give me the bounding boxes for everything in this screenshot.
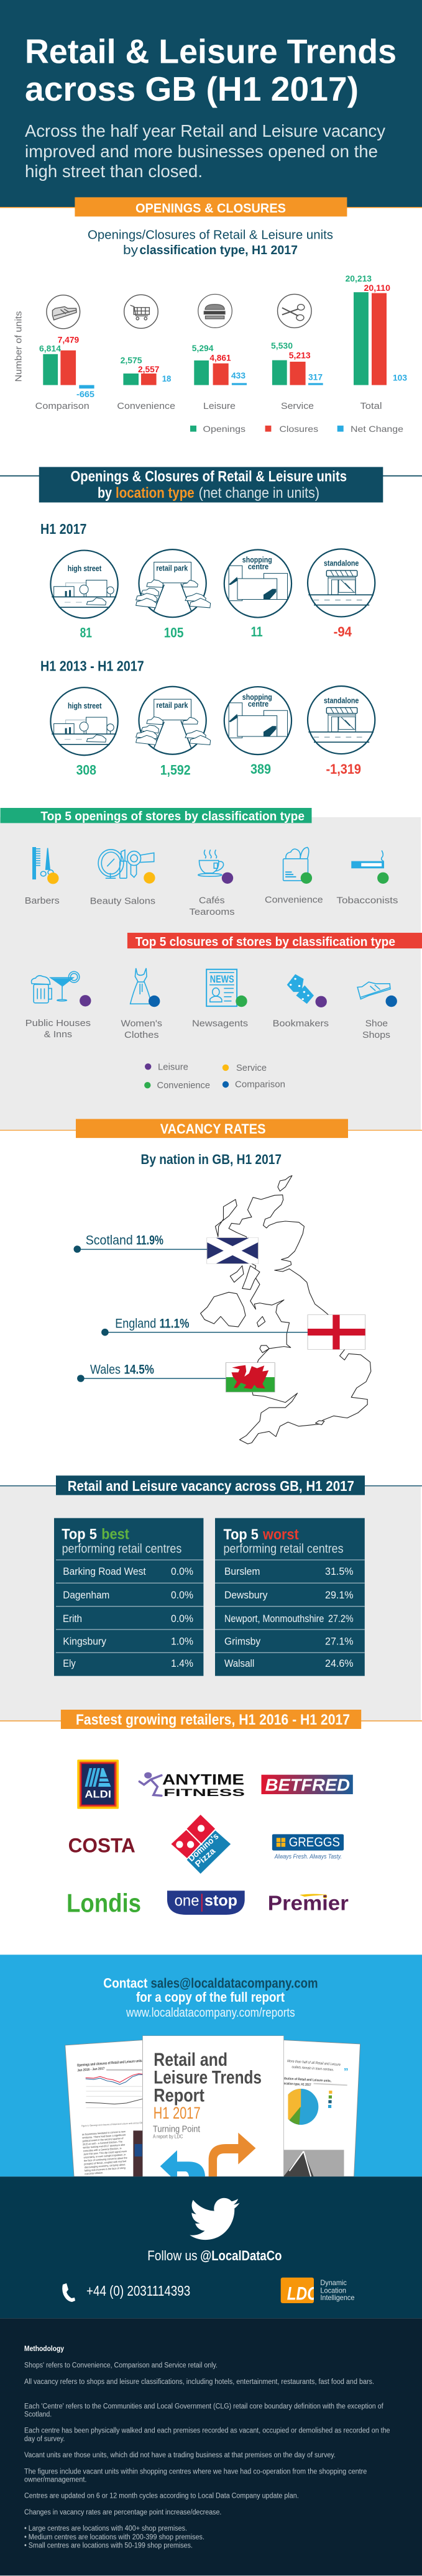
tagline: Location	[320, 2286, 346, 2294]
report link: www.localdatacompany.com/reports	[126, 2006, 295, 2020]
section banner: location type: Openings & Closures of Retail & Leisure units	[71, 468, 347, 485]
report page: right	[283, 2040, 360, 2176]
icon: tobacconists	[336, 850, 398, 905]
cover title: Retail and	[154, 2050, 227, 2070]
logo: Londis: Londis	[67, 1889, 141, 1918]
logo: Domino's Pizza	[171, 1815, 231, 1874]
report page: cover: A report by LDC	[153, 2134, 183, 2140]
value labels: openings: 5,530	[271, 341, 293, 351]
icon: standalone shop	[308, 686, 375, 754]
icon: standalone shop	[308, 549, 375, 616]
flag: Scotland	[207, 1238, 258, 1263]
callout: England	[101, 1317, 308, 1336]
table: top 5 best: Top 5	[62, 1526, 97, 1543]
follow text	[147, 2248, 282, 2263]
table: top 5 best: best	[101, 1526, 129, 1543]
table: top 5 best: Dagenham	[63, 1589, 109, 1601]
table: top 5 best: 0.0%	[171, 1613, 193, 1625]
icon: bookmakers: Bookmakers	[273, 1019, 329, 1029]
net change numbers	[80, 624, 352, 640]
flag: Wales	[226, 1363, 275, 1392]
net change numbers: 1,592	[160, 762, 191, 778]
methodology heading: Methodology	[24, 2345, 65, 2353]
map outline	[201, 1176, 371, 1444]
callout: Scotland	[73, 1234, 207, 1253]
logo: Domino's Pizza: Pizza	[193, 1846, 217, 1869]
heading: H1 2017: H1 2017	[40, 521, 87, 537]
report page: left: 2015 as well – a General Election. The	[83, 2140, 123, 2146]
report page: left: uncertainty, or even outright trepidation, in	[83, 2153, 126, 2159]
report page: right: More than half of all Retail and Leisure	[287, 2060, 341, 2067]
banner: top 5 closures: Top 5 closures of stores by classification type	[135, 935, 395, 949]
panel: header	[0, 0, 422, 208]
value labels: net change: 18	[162, 374, 172, 383]
icon: shopping centre: centre	[248, 562, 268, 571]
category labels: Service	[281, 401, 314, 411]
net change numbers: -94	[334, 624, 352, 639]
title: Retail & Leisure Trends	[25, 32, 397, 71]
table: top 5 worst: Dewsbury	[224, 1589, 268, 1601]
methodology text: • Large centres are locations with 400+ shop premises.	[24, 2525, 187, 2532]
contact text: for a copy of the full report	[136, 1989, 285, 2005]
value labels: openings: 6,814	[39, 344, 61, 354]
heading: H1 2013 - H1 2017: H1 2013 - H1 2017	[40, 658, 144, 674]
legend: classification colours: Service	[236, 1063, 267, 1073]
net change numbers	[76, 761, 361, 778]
table: top 5 best: 0.0%	[171, 1565, 193, 1577]
logo: One Stop	[167, 1891, 245, 1915]
section banner: openings and closures	[75, 197, 347, 216]
table: top 5 worst: Grimsby	[224, 1636, 261, 1648]
value labels: closures: 7,479	[58, 335, 79, 345]
panel: methodology	[0, 2318, 422, 2575]
icon: cafes and tearooms: Cafés	[199, 895, 225, 905]
table: top 5 worst: performing retail centres	[224, 1542, 344, 1556]
value labels: openings: 20,213	[346, 273, 372, 283]
table: top 5 worst: Newport, Monmouthshire	[224, 1613, 324, 1625]
report page: left: falling real incomes in the face of rising	[85, 2166, 126, 2172]
panel: retailer logos	[67, 1759, 353, 1918]
icon: shopping centre: centre	[248, 699, 268, 708]
value labels: closures: 20,110	[364, 283, 390, 293]
legend: classification colours: Convenience	[157, 1080, 210, 1091]
icon: shopping centre	[224, 687, 291, 754]
callout: Wales: Wales	[90, 1362, 121, 1377]
net change numbers: 389	[250, 761, 271, 777]
callout: Wales	[77, 1362, 226, 1382]
methodology text: Shops' refers to Convenience, Comparison and Service retail only.	[24, 2362, 218, 2370]
section banner: vacancy rates	[0, 1119, 422, 1138]
table: top 5 best: Erith	[63, 1613, 82, 1625]
net change numbers: 11	[251, 624, 263, 639]
icon: public houses and inns	[25, 971, 91, 1040]
report page: left	[65, 2040, 143, 2176]
icon: beauty salons	[90, 850, 155, 907]
contact text	[103, 1976, 318, 2005]
icon: public houses and inns: Public Houses	[25, 1018, 91, 1029]
chart heading: Openings/Closures of Retail & Leisure units	[88, 229, 333, 242]
panel: top 5 openings and closures	[0, 808, 422, 1130]
legend: Net Change	[351, 424, 403, 434]
table: top 5 best: Ely	[63, 1657, 76, 1669]
report page: left: June this year. This dip could signal more	[83, 2150, 127, 2156]
section banner: vacancy rates: VACANCY RATES	[160, 1121, 266, 1137]
title: across GB (H1 2017)	[25, 70, 359, 108]
callout: Wales: 14.5%	[124, 1362, 154, 1377]
chart heading: by	[123, 244, 138, 257]
value labels: net change: 317	[308, 372, 323, 382]
icon: shoe shops: Shops	[362, 1030, 390, 1040]
logo: Domino's Pizza: Domino's	[186, 1831, 221, 1863]
methodology text: day of survey.	[24, 2436, 65, 2443]
icon: convenience	[265, 847, 323, 905]
banner: top 5 openings: Top 5 openings of stores by classification type	[40, 810, 305, 823]
value labels: net change: 103	[393, 373, 407, 383]
bars: leisure	[194, 360, 247, 385]
title	[25, 32, 397, 108]
net change numbers: 105	[164, 625, 183, 640]
report page: left: similar looking mid-2017 downturn also	[83, 2143, 126, 2149]
bars: service	[272, 360, 323, 385]
logo: Anytime Fitness	[139, 1772, 245, 1799]
value labels: closures: 2,557	[138, 364, 160, 374]
icon: barbers	[25, 848, 60, 906]
logo: Betfred: BETFRED	[265, 1776, 350, 1795]
icon: women's clothes: Women's	[121, 1019, 162, 1029]
table: top 5 best: 0.0%	[171, 1589, 193, 1601]
report page: right: ibution of Retail and Leisure units,	[284, 2077, 331, 2083]
panel: social and contact footer	[0, 2176, 422, 2318]
icon: high street	[50, 551, 118, 618]
section banner: location type	[0, 467, 422, 502]
flag: England	[308, 1315, 365, 1349]
table: top 5 best	[54, 1518, 203, 1676]
icon: retail park	[136, 687, 211, 754]
icon: shoe shops: Shoe	[365, 1019, 388, 1029]
logo: One Stop: stop	[204, 1892, 237, 1910]
table: top 5 worst: 27.1%	[325, 1636, 354, 1648]
legend: classification colours	[144, 1061, 285, 1091]
logo: One Stop: one	[175, 1892, 199, 1910]
category labels	[35, 401, 382, 411]
panel: contact	[0, 1955, 422, 2176]
logo: Premier: Premier	[268, 1891, 349, 1914]
table: top 5 worst: Walsall	[224, 1657, 254, 1669]
methodology text: Vacant units are those units, which did not have a trading business at that premises on the day of survey.	[24, 2452, 336, 2459]
logo: Anytime Fitness: ANYTIME	[162, 1772, 244, 1789]
icon: standalone shop: standalone	[324, 558, 359, 567]
icon: women's clothes	[121, 968, 162, 1040]
section banner: location type: location type	[116, 485, 195, 502]
report page: left: political event in the second quarter of	[82, 2137, 124, 2143]
methodology text: Each centre has been physically walked and each premises recorded as vacant, occupied or demolished as recorded on the	[24, 2427, 390, 2435]
icon: shopping centre	[224, 549, 291, 618]
report page: right: ocation type, H1 2017	[283, 2082, 311, 2087]
icon: scissors	[278, 294, 311, 328]
value labels: net change	[76, 370, 407, 399]
bars: convenience	[123, 374, 157, 385]
report page: left: discouraging economy, certainly about	[84, 2163, 126, 2169]
icon: high street	[50, 687, 118, 755]
logo: Greggs: GREGGS	[289, 1835, 340, 1849]
tagline	[320, 2278, 355, 2302]
methodology text: Changes in vacancy rates are percentage point increase/decrease.	[24, 2509, 221, 2516]
icon: twitter bird	[190, 2198, 239, 2240]
icon: retail park: retail park	[156, 563, 188, 572]
logo: Aldi	[77, 1759, 119, 1809]
section banner: location type: (net change in units)	[199, 485, 319, 502]
icon: bookmakers	[273, 974, 329, 1029]
category labels: Convenience	[117, 401, 175, 411]
net change numbers: 308	[76, 762, 96, 778]
methodology text: owner/management.	[24, 2476, 87, 2483]
icon: barbers: Barbers	[25, 896, 60, 906]
icon: cafes and tearooms	[189, 850, 235, 917]
value labels: closures: 4,861	[209, 353, 231, 363]
callout: England: England	[115, 1317, 156, 1331]
value labels: openings: 5,294	[192, 343, 214, 353]
chart heading: classification type, H1 2017	[139, 244, 298, 257]
report page: left: Jan 2016 - Jun 2017	[77, 2067, 105, 2073]
icon: standalone shop: standalone	[324, 695, 359, 705]
table: top 5 best: performing retail centres	[62, 1542, 181, 1556]
callout: Scotland: Scotland	[86, 1234, 133, 1248]
methodology text: • Small centres are locations with 50-199 shop premises.	[24, 2542, 193, 2549]
methodology text	[24, 2362, 390, 2549]
cover title	[154, 2050, 262, 2106]
icon: shopping trolley	[124, 295, 158, 328]
icon: shoe shops	[357, 982, 397, 1040]
section banner: location type: by	[98, 485, 112, 502]
report page: cover: H1 2017	[154, 2104, 201, 2122]
methodology text: Each 'Centre' refers to the Communities and Local Government (CLG) retail core boundary definition with the exception of	[24, 2403, 383, 2410]
table: top 5 worst: 24.6%	[325, 1657, 354, 1669]
value labels: openings: 2,575	[121, 355, 142, 365]
table: top 5 worst: worst	[262, 1526, 299, 1543]
icon: shopping centre: shopping	[242, 555, 272, 564]
section banner: vacancy across GB: Retail and Leisure vacancy across GB, H1 2017	[68, 1478, 354, 1494]
arrow: blue left	[160, 2150, 205, 2176]
legend: Closures	[280, 424, 318, 434]
icon: newsagents	[192, 969, 248, 1029]
legend: classification colours: Comparison	[235, 1079, 285, 1090]
icon: burger	[198, 294, 232, 328]
callout: England: 11.1%	[159, 1317, 190, 1331]
axis title: Number of units	[14, 311, 24, 382]
value labels: closures	[58, 283, 390, 374]
follow text: Follow us	[147, 2248, 198, 2263]
logo: Aldi: ALDI	[85, 1789, 111, 1800]
table: top 5 worst: 31.5%	[325, 1565, 354, 1577]
logo: Costa: COSTA	[68, 1835, 135, 1857]
report page: right: ”	[344, 2066, 348, 2077]
icon: high street: high street	[68, 564, 102, 573]
icon: cafes and tearooms: Tearooms	[189, 907, 235, 917]
table: top 5 worst: 29.1%	[325, 1589, 354, 1601]
category labels: Comparison	[35, 401, 89, 411]
tagline: Intelligence	[320, 2293, 355, 2302]
cover title: Leisure Trends	[154, 2068, 262, 2088]
category labels: Total	[360, 401, 382, 411]
report page: left: ventures. There had been a significant	[82, 2133, 126, 2139]
icon: women's clothes: Clothes	[124, 1030, 159, 1040]
value labels: net change: -665	[76, 389, 94, 399]
logo: LDC	[281, 2278, 319, 2304]
table: top 5 worst: Burslem	[224, 1565, 260, 1577]
legend: classification colours: Leisure	[158, 1061, 188, 1072]
section banner: fastest growing retailers: Fastest growing retailers, H1 2016 - H1 2017	[76, 1712, 350, 1728]
location row: H1 2017	[50, 549, 375, 640]
table: top 5 best: 1.4%	[171, 1657, 193, 1669]
report page: left: the face of continuing concerns about the	[84, 2156, 127, 2162]
map: vacancy by nation	[73, 1176, 371, 1444]
methodology text: Scotland.	[24, 2411, 52, 2419]
report page: left: as businesses hesitated to commit to new	[82, 2130, 126, 2136]
icon: shopping centre: shopping	[242, 692, 272, 702]
net change numbers: 81	[80, 625, 92, 640]
section banner: openings and closures: OPENINGS & CLOSURES	[135, 201, 286, 216]
phone number: +44 (0) 2031114393	[86, 2283, 190, 2299]
icon: newsagents: NEWS	[210, 973, 234, 985]
icon: tobacconists: Tobacconists	[336, 895, 398, 905]
bars: total	[354, 292, 387, 385]
intro text: high street than closed.	[25, 162, 203, 181]
tagline: Dynamic	[320, 2278, 347, 2287]
report page: right: outlets remain in town centres.	[291, 2066, 334, 2072]
value labels: openings	[39, 273, 372, 365]
logo: Anytime Fitness: FITNESS	[163, 1787, 245, 1799]
bar chart: openings and closures by classification	[14, 273, 407, 434]
table: top 5 best: Barking Road West	[63, 1565, 146, 1577]
report page: cover: Turning Point	[153, 2124, 201, 2135]
table: top 5 best: 1.0%	[171, 1636, 193, 1648]
report page: left: Figure 6: Openings and closures of Retail and Leisure units across GB	[81, 2122, 142, 2127]
bars: comparison	[43, 351, 94, 388]
report page: cover	[143, 2036, 283, 2176]
icon: public houses and inns: & Inns	[44, 1029, 72, 1040]
category labels: Leisure	[203, 401, 236, 411]
cover title: Report	[154, 2085, 204, 2106]
heading: by nation: By nation in GB, H1 2017	[140, 1152, 282, 1167]
chart heading	[88, 229, 333, 257]
arrow: orange right	[209, 2133, 255, 2176]
icon: phone	[62, 2283, 75, 2302]
net change numbers: -1,319	[326, 761, 361, 777]
logo: Greggs: Always Fresh. Always Tasty.	[274, 1854, 342, 1861]
follow text: @LocalDataCo	[200, 2248, 282, 2263]
section banner: fastest growing retailers	[0, 1710, 422, 1729]
icon: shoe	[47, 295, 80, 329]
methodology text: The figures include vacant units within shopping centres where we have had co-operation from the shopping centre	[24, 2468, 367, 2475]
intro text: improved and more businesses opened on the	[25, 142, 378, 161]
location row: H1 2013 - H1 2017	[50, 686, 375, 778]
contact text: Contact	[103, 1976, 148, 1991]
intro text: Across the half year Retail and Leisure vacancy	[25, 121, 385, 140]
report page: left: real price inflation.	[85, 2171, 103, 2175]
intro text	[25, 121, 385, 181]
value labels: net change: 433	[231, 370, 245, 380]
legend: Openings	[203, 424, 245, 434]
methodology text: All vacancy refers to shops and leisure classifications, including hotels, entertainment, restaurants, fast food and bars.	[24, 2378, 374, 2386]
methodology text: Centres are updated on 6 or 12 month cycles according to Local Data Company update plan.	[24, 2492, 299, 2500]
panel: vacancy across GB	[0, 1475, 422, 1721]
report page: left: Openings and closures of Retail and Leisure units	[77, 2060, 142, 2068]
icon: newsagents: Newsagents	[192, 1019, 248, 1029]
table: top 5 best: Kingsbury	[63, 1636, 106, 1648]
icon: convenience: Convenience	[265, 895, 323, 905]
icon: beauty salons: Beauty Salons	[90, 896, 155, 907]
icon: retail park	[136, 549, 211, 617]
legend	[190, 424, 403, 434]
contact text: sales@localdatacompany.com	[150, 1976, 318, 1991]
report page: left: coincides with a General Election, in	[83, 2147, 122, 2152]
table: top 5 worst: Top 5	[224, 1526, 259, 1543]
table: top 5 worst: 27.2%	[328, 1613, 354, 1625]
icon: high street: high street	[68, 701, 102, 710]
report page: left: prospect of Brexit, coupled with real but	[84, 2160, 127, 2166]
value labels: closures: 5,213	[289, 350, 311, 360]
logo: Greggs	[272, 1834, 344, 1861]
icon: retail park: retail park	[156, 700, 188, 710]
callout: Scotland: 11.9%	[136, 1234, 163, 1248]
methodology text: • Medium centres are locations with 200-399 shop premises.	[24, 2534, 204, 2541]
table: top 5 worst	[215, 1518, 365, 1676]
